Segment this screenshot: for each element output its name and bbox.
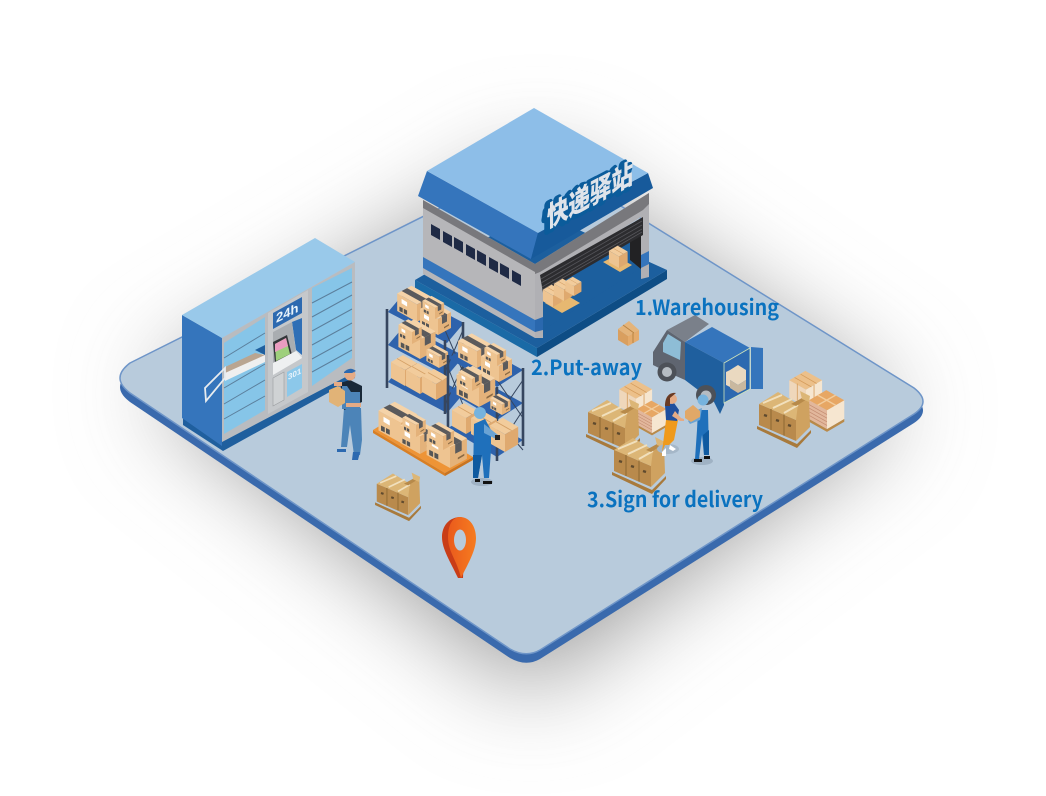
warehouse worker xyxy=(471,407,500,486)
kiosk centre: 301 xyxy=(288,366,302,382)
kiosk centre: 24h xyxy=(276,299,298,326)
kiosk centre xyxy=(268,290,308,414)
single parcel xyxy=(618,321,639,346)
windows xyxy=(431,224,521,286)
boxes in the doorway xyxy=(543,246,632,313)
roof xyxy=(418,108,653,259)
right wall and door xyxy=(535,193,649,338)
customer xyxy=(657,393,684,456)
step label: warehousing: 1.Warehousing xyxy=(635,292,779,322)
parcel locker xyxy=(182,238,355,451)
background shadow xyxy=(150,160,900,690)
sign: express station: 快递驿站 xyxy=(544,159,630,236)
orange pallet with boxes xyxy=(373,402,473,476)
delivery truck xyxy=(653,315,763,414)
platform xyxy=(120,157,923,663)
left wall xyxy=(423,200,535,338)
worker with parcel xyxy=(329,369,362,460)
locker doors right xyxy=(312,268,352,386)
warehouse building xyxy=(415,108,667,357)
map location pin xyxy=(442,517,476,578)
base slab xyxy=(415,210,667,357)
shelving rack back xyxy=(387,286,523,461)
small pallet of cartons xyxy=(375,473,421,521)
step label: sign for delivery: 3.Sign for delivery xyxy=(587,484,763,514)
locker doors left xyxy=(205,317,265,434)
courier handing parcel xyxy=(685,394,713,465)
step label: put-away: 2.Put-away xyxy=(531,352,642,382)
stacks of cartons near truck xyxy=(586,371,844,494)
sign: express station: 快递驿站 xyxy=(547,157,633,234)
